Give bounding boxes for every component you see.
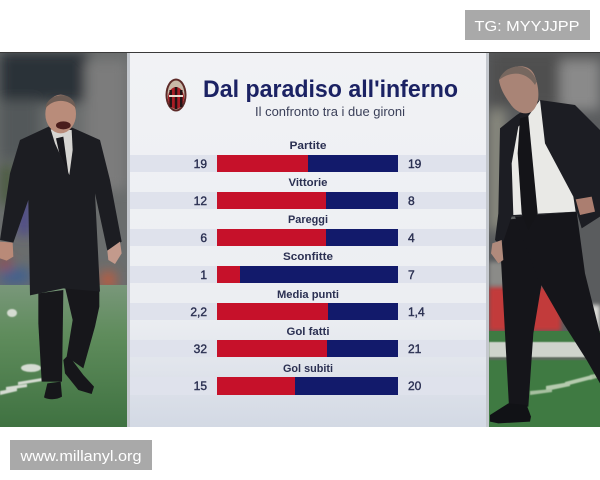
row: Vittorie: Vittorie: [288, 177, 328, 189]
row: Gol subiti: Gol subiti: [283, 363, 333, 375]
subtitle: Il confronto tra i due gironi: [255, 104, 405, 119]
row: Media punti: [130, 289, 486, 320]
row: Pareggi: 4: [408, 231, 415, 245]
title: Dal paradiso all'inferno: [203, 76, 458, 103]
row: Vittorie: 12: [194, 194, 207, 208]
row: Media punti: 1,4: [408, 305, 425, 319]
row: Sconfitte: 1: [200, 268, 207, 282]
watermark: TG: TG: MYYJJPP: [474, 18, 580, 35]
pitch: right: [489, 331, 600, 427]
row: Sconfitte: Sconfitte: [283, 251, 333, 263]
row: Gol fatti: 21: [408, 342, 422, 356]
row: Sconfitte: [130, 251, 486, 283]
pitch: left: [0, 285, 127, 427]
row: Sconfitte: 7: [408, 268, 415, 282]
watermark: website: [10, 440, 152, 470]
photo: left coach celebrating: [0, 52, 127, 427]
row: Pareggi: 6: [200, 231, 207, 245]
row: Gol fatti: Gol fatti: [286, 326, 330, 338]
panel: statistics comparison: [0, 52, 600, 427]
photo: right coach dejected: [489, 52, 600, 427]
row: Vittorie: [130, 177, 486, 209]
row: Gol subiti: 20: [408, 379, 422, 393]
watermark: website: www.millanyl.org: [19, 448, 142, 465]
row: Vittorie: 8: [408, 194, 415, 208]
row: Partite: [130, 140, 486, 172]
row: Partite: 19: [408, 157, 422, 171]
row: Gol fatti: 32: [194, 342, 207, 356]
row: Media punti: 2,2: [190, 305, 207, 319]
row: Gol subiti: [130, 363, 486, 395]
figure: right coach: [490, 66, 600, 423]
figure: left coach: [0, 95, 122, 399]
watermark: TG: [465, 10, 590, 40]
icon: AC Milan crest: [166, 78, 186, 112]
row: Partite: Partite: [290, 140, 326, 152]
row: Pareggi: [130, 214, 486, 246]
row: Pareggi: Pareggi: [288, 214, 328, 226]
row: Media punti: Media punti: [277, 289, 339, 301]
advertising board: [489, 262, 600, 332]
row: Partite: 19: [194, 157, 207, 171]
row: Gol subiti: 15: [194, 379, 207, 393]
row: Gol fatti: [130, 326, 486, 357]
